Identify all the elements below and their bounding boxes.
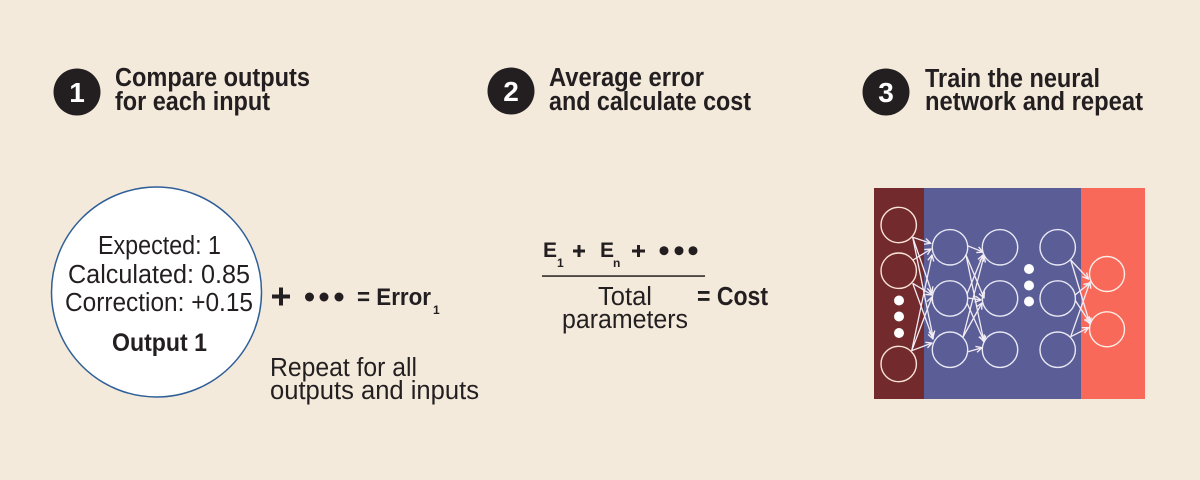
neural network diagram: [874, 188, 1145, 399]
input layer band: [874, 188, 924, 399]
step 3 number badge: 3: [878, 77, 894, 108]
ellipsis dots: [305, 292, 344, 302]
comparison values: Expected: 1: [98, 232, 221, 260]
denominator: Total: [598, 283, 652, 311]
step 3 number badge: [862, 68, 910, 116]
repeat note: Repeat for all: [270, 354, 417, 382]
cost formula: [542, 239, 768, 334]
output nodes: [1090, 256, 1124, 347]
step 3 heading: [862, 65, 1143, 116]
comparison values: Correction: +0.15: [65, 289, 253, 317]
denominator: parameters: [562, 306, 688, 334]
step 1 title: [115, 64, 310, 116]
comparison values: [65, 232, 253, 317]
error label: = Error: [357, 284, 431, 311]
step 2 title: [549, 64, 751, 116]
numerator: E: [600, 239, 614, 262]
hidden layers band: [924, 188, 1081, 399]
connection arrows: [912, 237, 1090, 352]
numerator: E: [543, 239, 557, 262]
output layer band: [1081, 188, 1145, 399]
denominator: [562, 283, 688, 334]
cost label: = Cost: [697, 283, 768, 311]
hidden nodes: [932, 230, 1075, 367]
fraction bar: [542, 275, 705, 277]
step 1 number badge: 1: [69, 77, 85, 108]
step 2 number badge: [488, 68, 534, 114]
plus sign: [272, 288, 290, 306]
repeat note: [270, 354, 479, 405]
input nodes: [881, 207, 916, 382]
error label: 1: [433, 303, 440, 317]
numerator: [543, 239, 698, 270]
output label: Output 1: [112, 329, 207, 357]
numerator: 1: [557, 256, 564, 270]
step 1 title: for each input: [115, 88, 270, 116]
step 3 title: Train the neural: [925, 65, 1100, 93]
step 1 title: Compare outputs: [115, 64, 310, 92]
step 1 heading: [54, 64, 310, 116]
step 2 heading: [488, 64, 751, 116]
step 3 title: [925, 65, 1143, 116]
repeat note: outputs and inputs: [270, 377, 479, 405]
step 1 number badge: [54, 68, 100, 116]
panel: output comparison circle: [52, 187, 262, 397]
step 2 number badge: 2: [503, 76, 519, 107]
step 3 title: network and repeat: [925, 88, 1143, 116]
error sum expression: [272, 284, 440, 317]
numerator: n: [613, 256, 620, 270]
step 2 title: Average error: [549, 64, 704, 92]
step 2 title: and calculate cost: [549, 88, 751, 116]
comparison values: Calculated: 0.85: [68, 261, 250, 289]
